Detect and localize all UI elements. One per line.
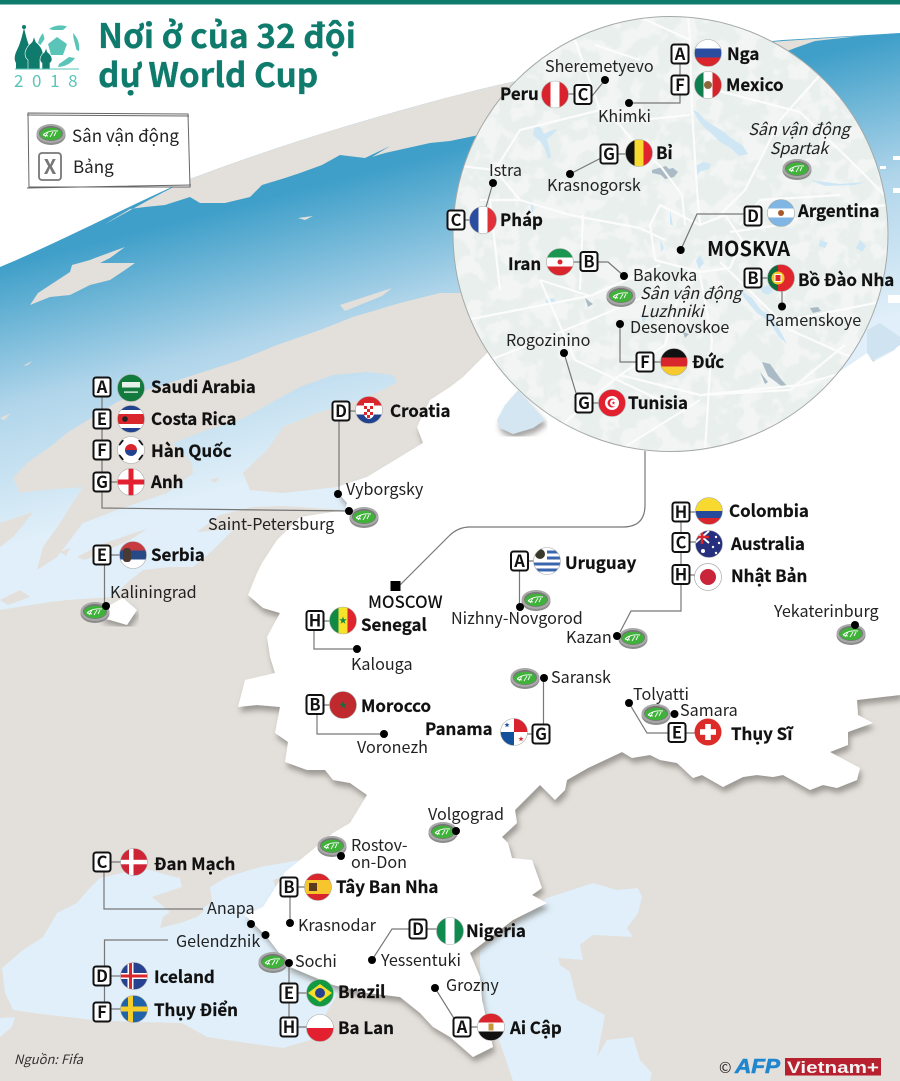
- team: Uruguay: Uruguay: [565, 549, 637, 574]
- ice flecks: [880, 156, 900, 303]
- city labels: Sheremetyevo: [545, 53, 654, 77]
- team: Nga: Nga: [727, 40, 759, 65]
- team: Đan Mạch: Đan Mạch: [154, 850, 235, 875]
- land: arctic island: [30, 247, 135, 305]
- team: Mexico: F: [675, 72, 685, 96]
- team: Ai Cập: Ai Cập: [509, 1014, 562, 1039]
- logo: Russia 2018: [14, 25, 86, 92]
- team: Nigeria: D: [412, 916, 424, 940]
- team: Senegal: [306, 606, 427, 636]
- team: Peru: Peru: [500, 80, 539, 105]
- team: Peru: [500, 80, 592, 108]
- team: Serbia: E: [97, 542, 107, 566]
- team: Tây Ban Nha: Tây Ban Nha: [336, 873, 438, 898]
- team: Colombia: [672, 497, 809, 525]
- team: Đức: [636, 348, 724, 376]
- city labels: [110, 53, 879, 996]
- team: Bỉ: [600, 139, 673, 167]
- team: Saudi Arabia: A: [96, 374, 108, 398]
- credit: AFP: ©: [719, 1057, 731, 1078]
- team: Nhật Bản: [672, 562, 807, 590]
- team: Pháp: Pháp: [500, 206, 543, 231]
- team: Argentina: [744, 197, 879, 228]
- team: Panama: G: [535, 721, 547, 745]
- Moscow marker: [390, 581, 400, 591]
- team: Ba Lan: Ba Lan: [338, 1014, 394, 1039]
- connector lines: [102, 54, 782, 1027]
- team: Bồ Đào Nha: Bồ Đào Nha: [798, 266, 894, 291]
- team: Tunisia: [576, 389, 688, 417]
- team: Mexico: Mexico: [726, 71, 784, 96]
- team: Ai Cập: [454, 1013, 562, 1042]
- team: Saudi Arabia: [94, 373, 256, 402]
- legend: group label: Bảng: [73, 153, 114, 178]
- team: Thụy Điển: F: [97, 999, 107, 1023]
- source note: Nguồn: Fifa: [14, 1049, 84, 1068]
- city labels: Kazan: [566, 624, 612, 648]
- legend: [27, 113, 191, 188]
- city labels: Kalouga: [351, 651, 413, 675]
- city labels: Voronezh: [357, 734, 428, 758]
- city labels: Vyborgsky: [346, 476, 424, 500]
- team: Colombia: H: [675, 499, 687, 523]
- team: Anh: [94, 468, 183, 496]
- team: Croatia: D: [335, 398, 347, 422]
- team: Iceland: [94, 962, 215, 990]
- team: Mexico: [672, 71, 784, 99]
- team: Thụy Sĩ: E: [672, 720, 682, 744]
- team: Ai Cập: A: [456, 1014, 468, 1038]
- team: Costa Rica: Costa Rica: [151, 405, 236, 430]
- team: Đức: F: [640, 349, 650, 373]
- city labels: Krasnodar: [298, 912, 377, 936]
- team: Serbia: Serbia: [151, 541, 205, 566]
- team: Uruguay: [511, 547, 637, 575]
- title: Nơi ở của 32 đội: [98, 9, 356, 58]
- team: Brazil: E: [284, 980, 294, 1004]
- team: Croatia: Croatia: [390, 397, 450, 422]
- team: Argentina: D: [747, 203, 759, 227]
- team: Anh: Anh: [150, 468, 183, 493]
- team: Senegal: Senegal: [361, 611, 427, 636]
- city labels: Grozny: [446, 972, 499, 996]
- city labels: Saransk: [551, 664, 611, 688]
- team: Australia: Australia: [730, 530, 805, 555]
- city labels: Yessentuki: [380, 947, 461, 971]
- team: Morocco: [306, 691, 431, 719]
- city labels: Sân vận động: [748, 116, 852, 140]
- team: Iceland: D: [96, 963, 108, 987]
- city labels: Spartak: [770, 135, 830, 159]
- sea: Caspian: [480, 883, 652, 1081]
- top bar: [0, 0, 900, 4]
- city labels: Nizhny-Novgorod: [451, 605, 583, 629]
- team: Thụy Điển: [94, 995, 238, 1023]
- team: Nga: A: [674, 41, 686, 65]
- legend: group box: X: [44, 151, 57, 180]
- team: Tây Ban Nha: [280, 873, 438, 901]
- team: Iran: B: [583, 248, 595, 272]
- city labels: Luzhniki: [640, 298, 706, 322]
- team: Peru: C: [578, 82, 589, 106]
- land: European mainland: [0, 500, 900, 1081]
- city labels: Saint-Petersburg: [208, 511, 334, 535]
- city labels: Sochi: [295, 948, 337, 972]
- team: Đức: Đức: [692, 348, 724, 373]
- team: Hàn Quốc: [94, 436, 232, 464]
- team: Bỉ: G: [603, 141, 615, 165]
- credit: Vietnam+: Vietnam+: [787, 1059, 879, 1077]
- credit: AFP: AFP: [734, 1056, 781, 1078]
- city labels: Khimki: [598, 103, 651, 127]
- team: Thụy Sĩ: Thụy Sĩ: [731, 720, 794, 745]
- team: Hàn Quốc: F: [97, 437, 107, 461]
- sea: Marmara: [0, 1017, 15, 1037]
- city labels: Sân vận động: [640, 280, 743, 304]
- land: Russia: [238, 300, 900, 1057]
- team: Thụy Điển: Thụy Điển: [154, 996, 238, 1021]
- team: Costa Rica: [94, 405, 236, 434]
- team: Morocco: B: [309, 692, 321, 716]
- team: Tây Ban Nha: B: [283, 874, 295, 898]
- team: Panama: Panama: [425, 715, 493, 740]
- city labels: Bakovka: [633, 262, 697, 286]
- team: Thụy Sĩ: [668, 718, 794, 746]
- team: Pháp: C: [451, 207, 462, 231]
- city labels: on-Don: [351, 849, 407, 873]
- legend: stadium icon: [36, 124, 66, 145]
- team: Iran: Iran: [508, 250, 541, 275]
- team: Panama: [425, 715, 550, 746]
- team: Serbia: [94, 541, 205, 569]
- team: Nga: [672, 39, 759, 68]
- team: Costa Rica: E: [97, 406, 107, 430]
- team: Brazil: Brazil: [338, 978, 385, 1003]
- team: Tunisia: G: [578, 390, 590, 414]
- team: Morocco: Morocco: [361, 692, 431, 717]
- legend: stadium label: Sân vận động: [72, 122, 179, 147]
- team: Bỉ: Bỉ: [656, 139, 673, 164]
- team: Pháp: [448, 206, 543, 234]
- land: Scandinavia and Finland: [13, 293, 520, 570]
- team: Colombia: Colombia: [729, 497, 809, 522]
- team: Australia: C: [676, 530, 687, 554]
- Moscow inset border: [453, 16, 888, 452]
- sea: Kara inlet: [867, 323, 900, 360]
- team: Ba Lan: [280, 1014, 394, 1042]
- team: Nhật Bản: H: [675, 562, 687, 586]
- stadiums: [80, 159, 866, 973]
- team: Bồ Đào Nha: [744, 264, 894, 292]
- team: Argentina: Argentina: [797, 197, 879, 222]
- title: [98, 9, 356, 97]
- sea: White Sea inlet: [497, 390, 545, 434]
- sea: Black Sea and Azov: [2, 858, 340, 1048]
- city labels: Rostov-: [351, 832, 408, 856]
- team: Nigeria: [410, 916, 526, 945]
- city labels: Desenovskoe: [630, 314, 729, 338]
- city labels: Anapa: [207, 895, 255, 919]
- team: Australia: [672, 530, 805, 558]
- city labels: Rogozinino: [506, 327, 590, 351]
- legend: group box: [39, 151, 61, 180]
- team: Nigeria: Nigeria: [466, 917, 526, 942]
- logo: Russia 2018: 2018: [14, 67, 86, 92]
- team: Đan Mạch: C: [97, 849, 108, 873]
- team: Hàn Quốc: Hàn Quốc: [151, 437, 232, 462]
- team: Iran: [508, 248, 598, 276]
- city labels: Kaliningrad: [110, 579, 197, 603]
- land: Kaliningrad: [100, 598, 137, 625]
- city labels: Istra: [489, 157, 522, 181]
- team: Anh: G: [96, 469, 108, 493]
- city labels: Tolyatti: [633, 681, 689, 705]
- team: Senegal: H: [309, 608, 321, 632]
- team: Ba Lan: H: [283, 1014, 295, 1038]
- land: Crimea: [152, 897, 205, 928]
- team: Nhật Bản: Nhật Bản: [731, 562, 807, 587]
- city labels: Krasnogorsk: [547, 172, 641, 196]
- city labels: Yekaterinburg: [773, 598, 879, 622]
- team: Tunisia: Tunisia: [628, 389, 688, 414]
- land: small islets: [0, 216, 392, 605]
- city labels: Volgograd: [428, 801, 504, 825]
- city labels: Ramenskoye: [765, 307, 861, 331]
- Moscow inset map: [450, 15, 892, 455]
- team: Iceland: Iceland: [154, 963, 215, 988]
- team: Uruguay: A: [513, 548, 525, 572]
- team: Bồ Đào Nha: B: [747, 265, 759, 289]
- city labels: Gelendzhik: [176, 928, 260, 952]
- team: Saudi Arabia: Saudi Arabia: [151, 373, 256, 398]
- team: Brazil: [280, 978, 385, 1007]
- title: dự World Cup: [98, 48, 318, 97]
- city dots: [102, 76, 859, 992]
- city labels: MOSCOW: [368, 589, 443, 613]
- credit: AFP: [719, 1056, 781, 1078]
- team: Croatia: [332, 396, 450, 424]
- team: Đan Mạch: [94, 848, 235, 876]
- land: northern strip on horizon: [105, 36, 860, 224]
- city labels: MOSKVA: [707, 233, 790, 262]
- city labels: Samara: [680, 697, 738, 721]
